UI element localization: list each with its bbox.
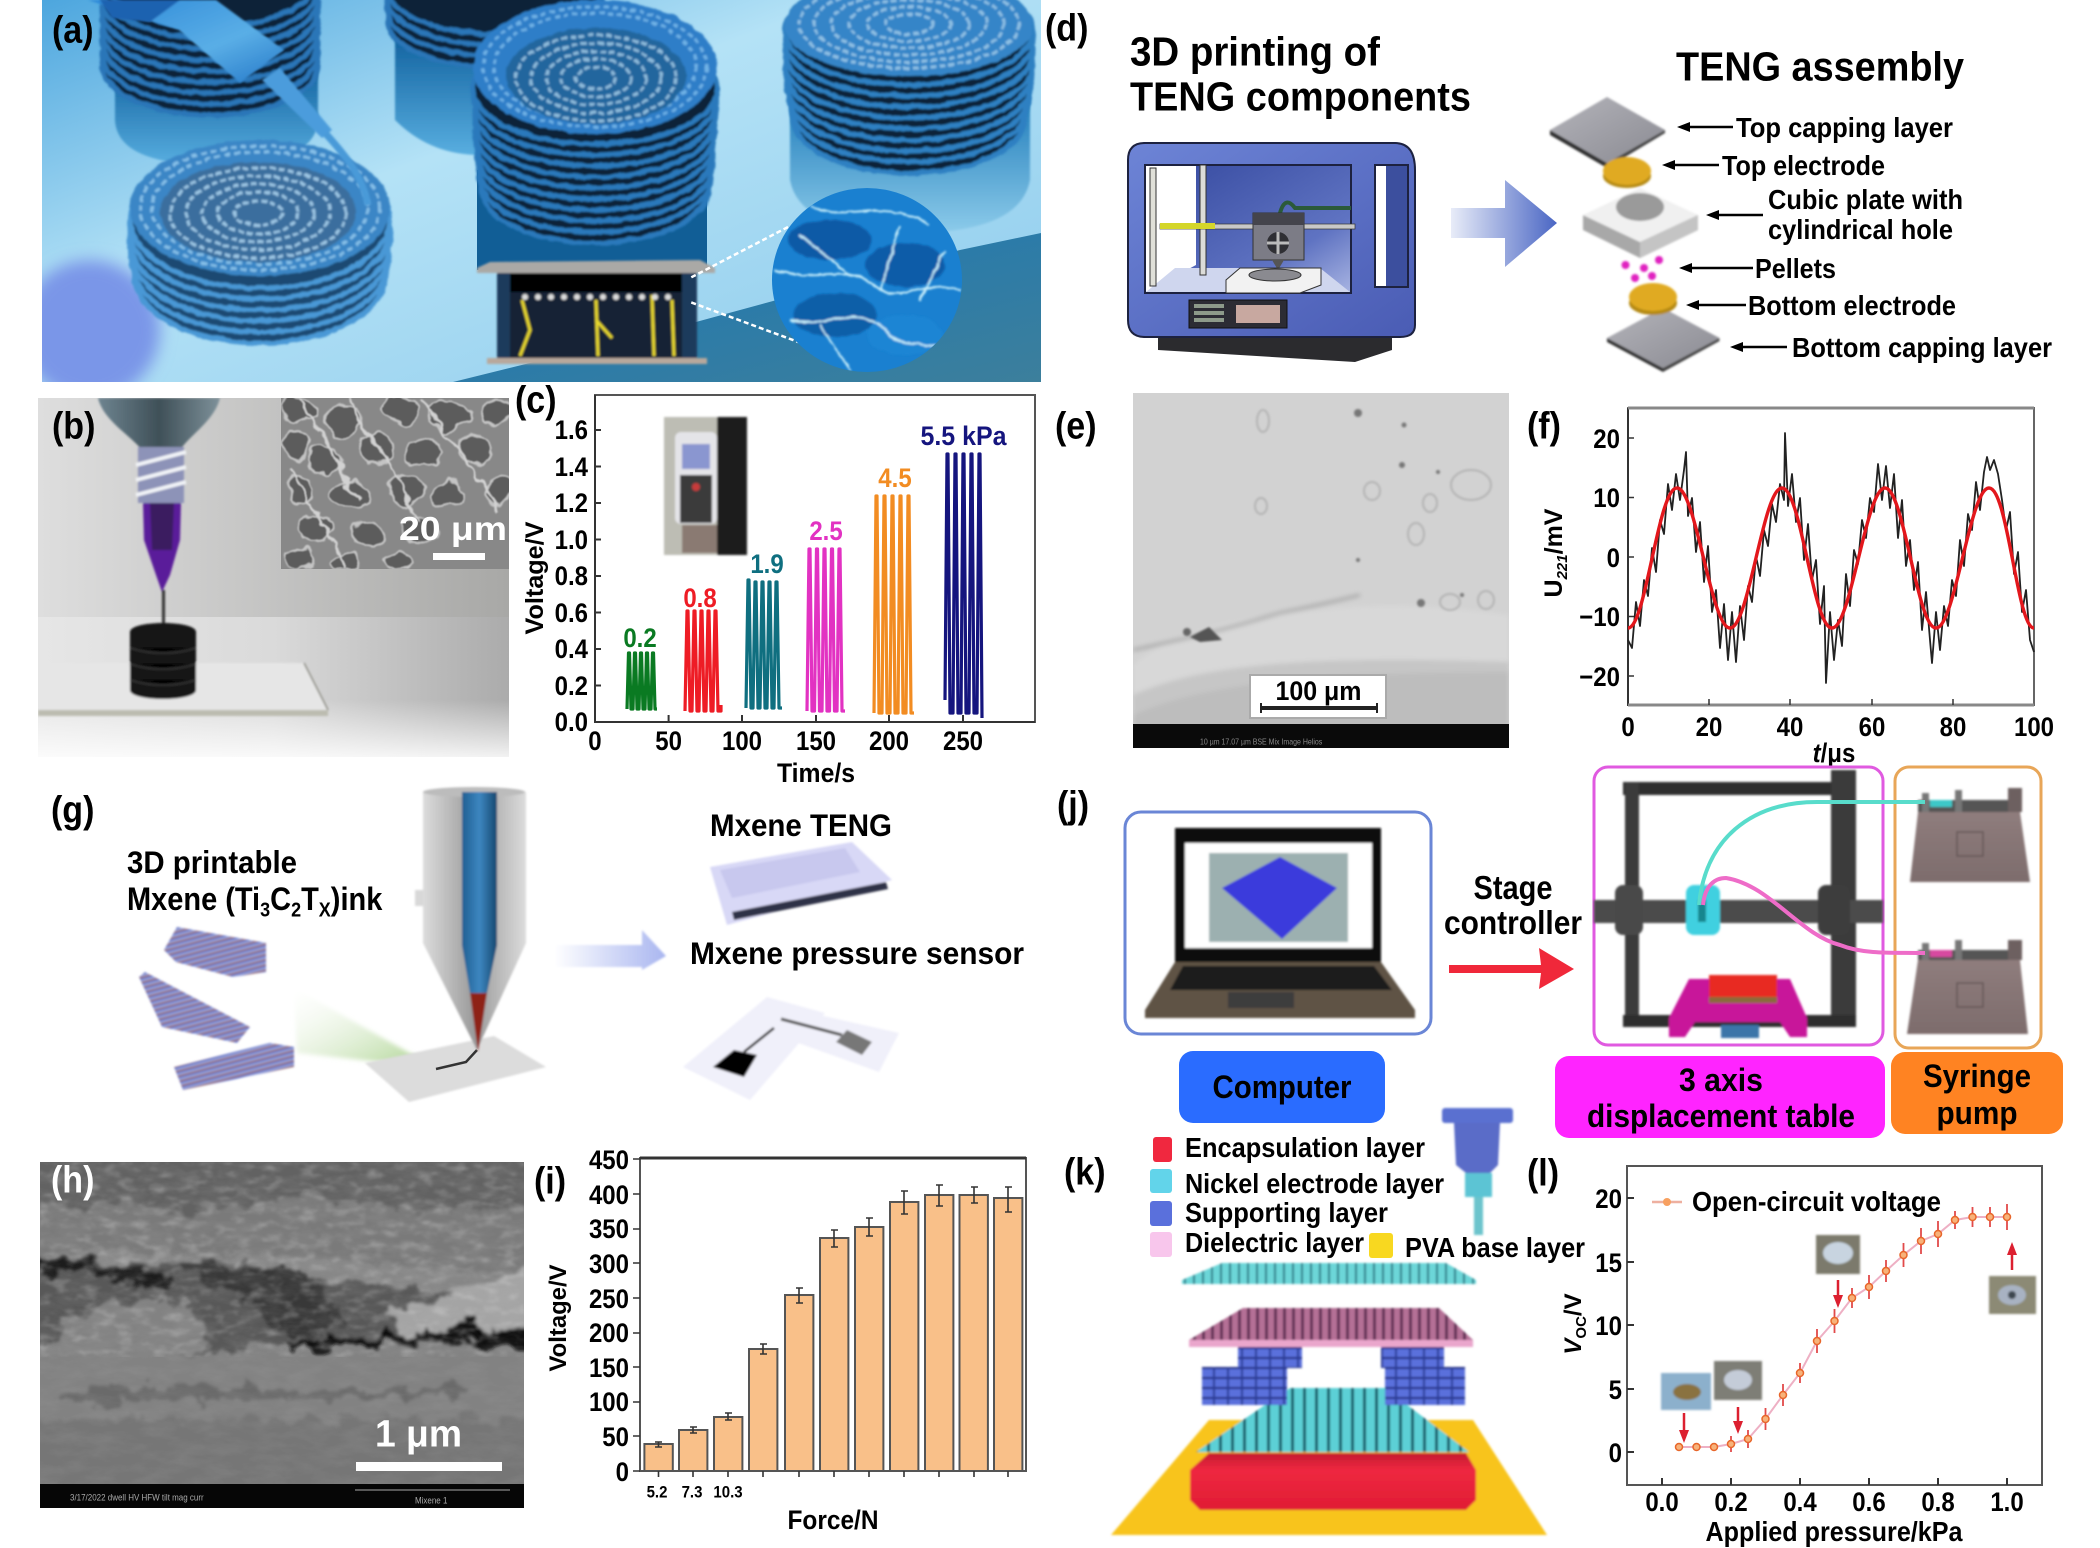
- panel letters: (h): [51, 1158, 94, 1201]
- panel c: voltage pulses chart: 0.8: [555, 562, 588, 591]
- Mxene TENG device: [710, 842, 892, 925]
- panel k legend: PVA base layer: [1405, 1232, 1585, 1263]
- arrow d: [1451, 180, 1557, 267]
- chart l photo insets and arrows: [1661, 1235, 2036, 1443]
- panel letters: (l): [1527, 1151, 1559, 1194]
- 3 axis label: [1555, 1056, 1885, 1138]
- panel c: voltage pulses chart: 1.6: [555, 416, 588, 445]
- panel l: open-circuit voltage chart: OC: [1573, 1316, 1590, 1339]
- panel c: voltage pulses chart: 250: [943, 727, 983, 756]
- panel h: cross-section SEM: Mixene 1: [415, 1495, 448, 1505]
- panel h: cross-section SEM: [40, 1162, 524, 1508]
- panel g labels: 2: [291, 900, 301, 922]
- ink tubes: [1699, 802, 1925, 953]
- syringe pump label: [1891, 1052, 2063, 1134]
- panel c: voltage pulses chart: 1.0: [555, 526, 588, 555]
- panel b inset: SEM pores: [281, 396, 511, 571]
- panel letters: (k): [1064, 1150, 1106, 1193]
- panel e: SEM image: 10 µm 17.07 µm BSE Mix Image Helios: [1200, 737, 1323, 746]
- assembly labels and arrows: cylindrical hole: [1768, 214, 1953, 245]
- syringe pump label: pump: [1936, 1095, 2017, 1132]
- panel i: force bar chart: 250: [589, 1285, 629, 1314]
- arrow g: [554, 930, 666, 970]
- green focus cone: [294, 988, 436, 1068]
- scale label b: 20 μm: [399, 510, 507, 548]
- panel g labels: T: [301, 880, 319, 917]
- panel c: voltage pulses chart: 0.6: [555, 599, 588, 628]
- panel l: open-circuit voltage chart: [1560, 1166, 2042, 1547]
- panel letters: (c): [515, 378, 557, 421]
- 3 axis label: displacement table: [1587, 1098, 1855, 1135]
- panel f: oscilloscope signal chart: t/μs: [1813, 739, 1855, 768]
- panel c: voltage pulses chart: 1.4: [555, 453, 589, 482]
- panel l: open-circuit voltage chart: Applied pressure/kPa: [1706, 1516, 1963, 1547]
- panel letters: (j): [1057, 783, 1089, 826]
- headings d: 3D printing of: [1130, 30, 1380, 75]
- panel c: voltage pulses chart: 0: [588, 727, 602, 756]
- stage controller arrow: Stage: [1474, 869, 1552, 907]
- panel l: open-circuit voltage chart: 0.0: [1645, 1488, 1679, 1517]
- headings d: [1130, 30, 1965, 120]
- panel j: computer box with laptop: [1125, 812, 1431, 1034]
- panel c: voltage pulses chart: 1.9: [750, 550, 784, 579]
- assembly labels and arrows: Pellets: [1755, 253, 1836, 284]
- syringe pump label: Syringe: [1923, 1058, 2031, 1095]
- panel i: force bar chart: 5.2: [647, 1484, 668, 1502]
- scale label b: [399, 510, 507, 560]
- assembly exploded view: [1550, 97, 1720, 372]
- panel a: 3D printed stacks render: [20, 0, 1041, 400]
- computer label: [1179, 1051, 1385, 1123]
- panel k legend: Supporting layer: [1185, 1197, 1388, 1228]
- assembly labels and arrows: [1662, 112, 2052, 363]
- stage controller arrow: controller: [1444, 904, 1582, 942]
- panel f: oscilloscope signal chart: 221: [1554, 554, 1571, 580]
- panel c: voltage pulses chart: Time/s: [777, 759, 855, 788]
- computer label: Computer: [1212, 1069, 1352, 1106]
- panel f: oscilloscope signal chart: U: [1540, 579, 1568, 597]
- panel c: voltage pulses chart: 0.2: [555, 672, 588, 701]
- panel l: open-circuit voltage chart: 0: [1609, 1439, 1622, 1468]
- panel c: voltage pulses chart: 150: [796, 727, 836, 756]
- assembly labels and arrows: Bottom electrode: [1748, 290, 1956, 321]
- Mxene pressure sensor: [683, 997, 899, 1100]
- panel g labels: Mxene (Ti: [127, 880, 260, 917]
- panel l: open-circuit voltage chart: 0.2: [1714, 1488, 1748, 1517]
- substrate: [365, 1036, 546, 1102]
- panel c: voltage pulses chart: 0.0: [555, 708, 588, 737]
- panel i: force bar chart: 10.3: [713, 1484, 743, 1502]
- panel c: voltage pulses chart: 1.2: [555, 489, 588, 518]
- panel i: force bar chart: Force/N: [788, 1506, 878, 1535]
- panel f: oscilloscope signal chart: 0: [1621, 713, 1635, 742]
- panel h: cross-section SEM: 3/17/2022 dwell HV HFW tilt mag curr: [70, 1492, 204, 1502]
- assembly labels and arrows: Top capping layer: [1736, 112, 1953, 143]
- panel f: oscilloscope signal chart: 60: [1859, 713, 1885, 742]
- panel f: oscilloscope signal chart: [1540, 408, 2054, 768]
- panel g labels: )ink: [331, 880, 383, 917]
- layer stack k: [1111, 1263, 1547, 1535]
- panel b: printing photo: [38, 398, 509, 757]
- panel g labels: [127, 809, 1024, 971]
- panel l: open-circuit voltage chart: 10: [1595, 1312, 1622, 1341]
- panel f: oscilloscope signal chart: −20: [1579, 663, 1620, 692]
- panel i: force bar chart: 400: [589, 1181, 629, 1210]
- assembly labels and arrows: Top electrode: [1722, 150, 1885, 181]
- panel l: open-circuit voltage chart: 5: [1609, 1376, 1622, 1405]
- panel f: oscilloscope signal chart: 20: [1696, 713, 1722, 742]
- panel f: oscilloscope signal chart: /mV: [1540, 508, 1568, 554]
- panel g labels: Mxene pressure sensor: [690, 937, 1024, 971]
- panel l: open-circuit voltage chart: 15: [1595, 1249, 1622, 1278]
- panel f: oscilloscope signal chart: 80: [1940, 713, 1966, 742]
- panel g labels: Mxene TENG: [710, 809, 892, 843]
- panel c: voltage pulses chart: 0.2: [623, 624, 657, 653]
- panel k legend: Encapsulation layer: [1185, 1132, 1425, 1163]
- panel l: open-circuit voltage chart: 1.0: [1990, 1488, 2024, 1517]
- panel f: oscilloscope signal chart: −10: [1579, 603, 1620, 632]
- panel l: open-circuit voltage chart: 0.6: [1852, 1488, 1886, 1517]
- panel f: oscilloscope signal chart: 20: [1593, 425, 1620, 454]
- panel i: force bar chart: [545, 1146, 1026, 1535]
- syringe: [88, 0, 368, 205]
- printed line: [436, 1050, 477, 1069]
- panel f: oscilloscope signal chart: 10: [1593, 484, 1620, 513]
- 3 axis label: 3 axis: [1679, 1062, 1763, 1099]
- panel c inset: force gauge photo: [664, 417, 747, 555]
- panel f: oscilloscope signal chart: 40: [1777, 713, 1803, 742]
- panel c: voltage pulses chart: 200: [869, 727, 909, 756]
- panel l: open-circuit voltage chart: 0.4: [1783, 1488, 1817, 1517]
- stage controller arrow: [1444, 869, 1582, 989]
- panel l: open-circuit voltage chart: 20: [1595, 1185, 1622, 1214]
- panel e: SEM image: 100 μm: [1276, 677, 1361, 706]
- panel c: voltage pulses chart: 5.5 kPa: [920, 422, 1007, 451]
- panel k legend: Dielectric layer: [1185, 1227, 1364, 1258]
- panel c: voltage pulses chart: [521, 395, 1035, 788]
- panel i: force bar chart: 300: [589, 1250, 629, 1279]
- panel g labels: X: [319, 900, 331, 922]
- panel c: voltage pulses chart: 4.5: [878, 464, 912, 493]
- panel letters: (d): [1045, 6, 1088, 49]
- assembly labels and arrows: Cubic plate with: [1768, 184, 1963, 215]
- headings d: TENG components: [1130, 75, 1471, 120]
- panel l: open-circuit voltage chart: 0.8: [1921, 1488, 1955, 1517]
- panel g labels: 3: [260, 900, 270, 922]
- panel letters: (e): [1055, 404, 1097, 447]
- panel f: oscilloscope signal chart: 100: [2014, 713, 2054, 742]
- headings d: TENG assembly: [1676, 45, 1965, 90]
- assembly labels and arrows: Bottom capping layer: [1792, 332, 2052, 363]
- panel letters: (g): [51, 788, 94, 831]
- panel k legend: Nickel electrode layer: [1185, 1168, 1444, 1199]
- panel g labels: 3D printable: [127, 846, 297, 880]
- panel letters: (f): [1527, 404, 1561, 447]
- panel i: force bar chart: 150: [589, 1354, 629, 1383]
- panel i: force bar chart: Voltage/V: [545, 1264, 572, 1372]
- panel i: force bar chart: 50: [602, 1423, 629, 1452]
- panel i: force bar chart: 0: [616, 1458, 629, 1487]
- panel c: voltage pulses chart: 50: [655, 727, 682, 756]
- printing nozzle: [415, 787, 526, 1052]
- panel i: force bar chart: 7.3: [682, 1484, 703, 1502]
- panel d: printer: [1128, 143, 1415, 362]
- panel i: force bar chart: 200: [589, 1319, 629, 1348]
- panel l: open-circuit voltage chart: Open-circuit voltage: [1692, 1186, 1941, 1217]
- device cross-section: [477, 260, 715, 364]
- panel c: voltage pulses chart: 0.4: [555, 635, 589, 664]
- panel k legend: [1150, 1132, 1585, 1263]
- panel e: SEM image: [1133, 393, 1509, 748]
- 3-axis stage box: [1594, 767, 1883, 1045]
- panel f: oscilloscope signal chart: 0: [1607, 544, 1620, 573]
- panel g: MXene ink flakes: [139, 927, 294, 1090]
- panel c: voltage pulses chart: 0.8: [683, 584, 717, 613]
- panel letters: (a): [52, 8, 94, 51]
- panel i: force bar chart: 350: [589, 1215, 629, 1244]
- panel i: force bar chart: 100: [589, 1388, 629, 1417]
- panel letters: (b): [52, 404, 95, 447]
- syringe pump box: [1895, 767, 2041, 1048]
- panel c: voltage pulses chart: 100: [722, 727, 762, 756]
- scale label h: [356, 1412, 502, 1471]
- panel letters: (i): [534, 1159, 566, 1202]
- panel c: voltage pulses chart: Voltage/V: [521, 521, 549, 634]
- panel l: open-circuit voltage chart: /V: [1560, 1293, 1587, 1316]
- scale label h: 1 μm: [375, 1412, 462, 1455]
- panel c: voltage pulses chart: 2.5: [809, 517, 843, 546]
- panel g labels: C: [270, 880, 291, 917]
- nozzle k: [1442, 1108, 1513, 1235]
- panel letters: [51, 6, 1561, 1202]
- panel i: force bar chart: 450: [589, 1146, 629, 1175]
- panel l: open-circuit voltage chart: V: [1560, 1337, 1587, 1355]
